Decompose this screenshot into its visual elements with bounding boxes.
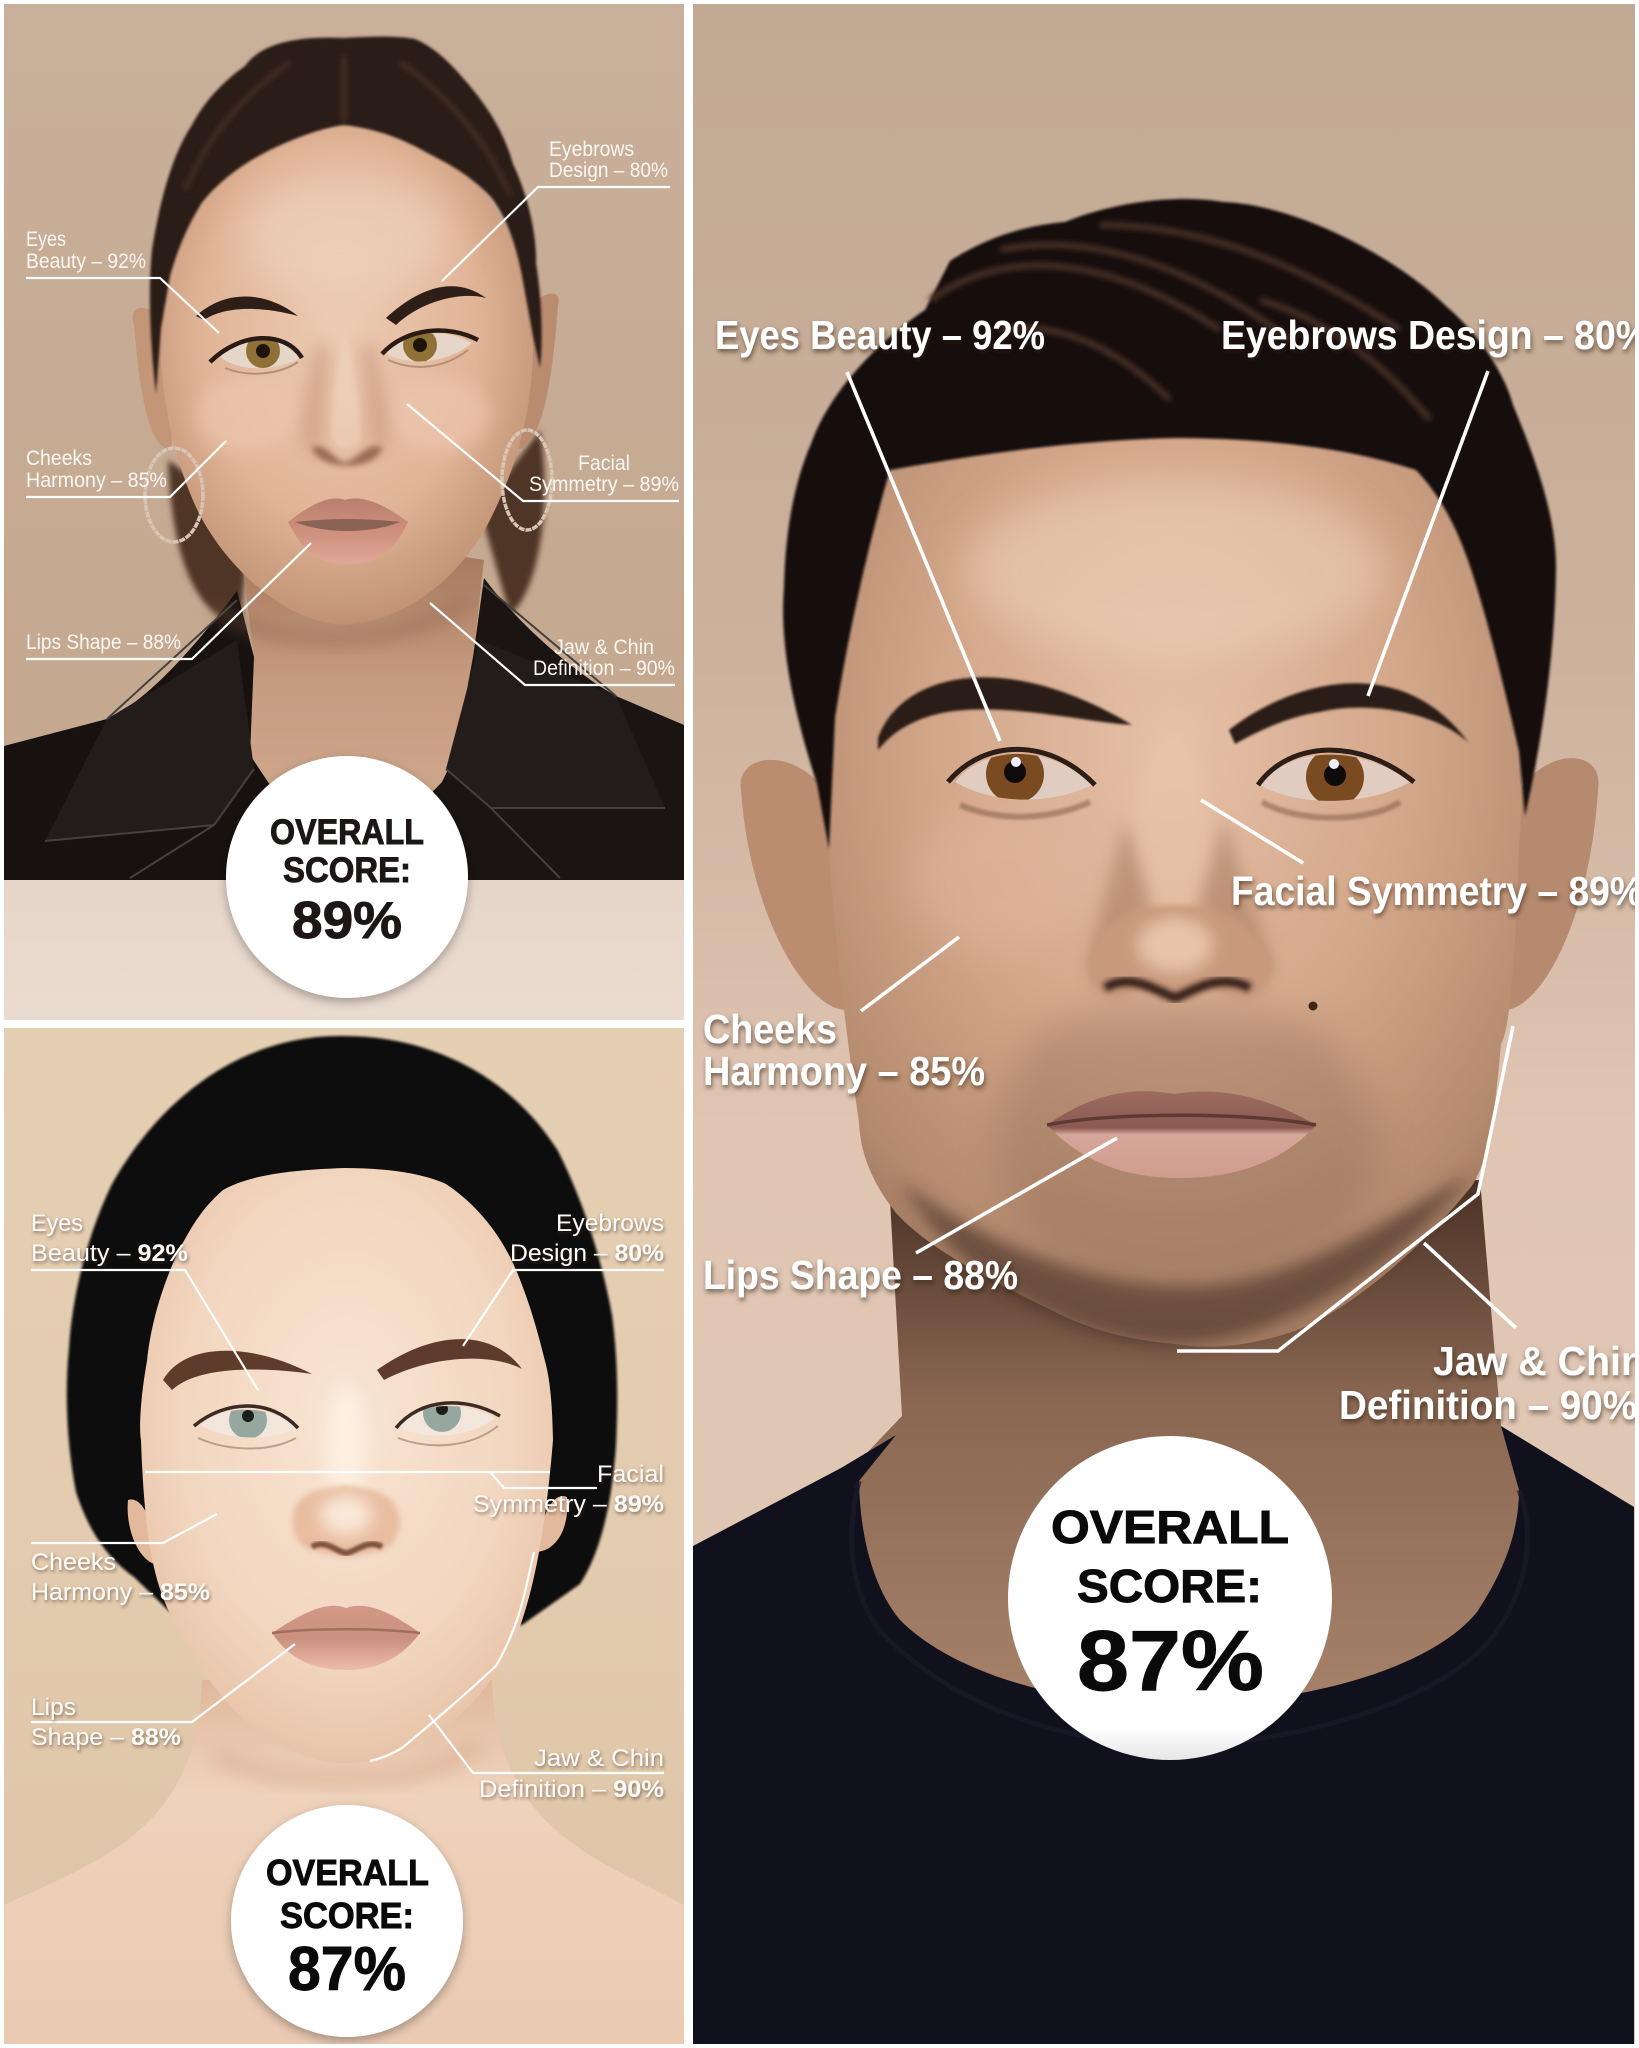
label: Eyebrows Design: Eyebrows — [556, 1210, 664, 1237]
label: Eyes Beauty: Beauty – 92% — [26, 250, 146, 273]
panel: man in dark t-shirt — [693, 4, 1639, 2044]
label: Cheeks Harmony: Cheeks — [703, 1006, 837, 1052]
label: Lips Shape: Lips Shape – 88% — [26, 631, 181, 654]
panel 1 backdrop — [4, 4, 684, 782]
portrait: man with swept hair — [693, 199, 1634, 2044]
score badge: 87%: OVERALL — [1051, 1501, 1289, 1553]
earrings — [145, 430, 552, 542]
score badge: 87% — [1008, 1436, 1332, 1760]
eyes and brows — [163, 1339, 522, 1448]
label: Lips Shape: Lips Shape – 88% — [703, 1252, 1018, 1298]
label: Facial Symmetry: Symmetry – 89% — [529, 473, 679, 496]
label: Facial Symmetry — [1201, 800, 1639, 914]
label: Facial Symmetry: Symmetry – 89% — [473, 1491, 664, 1518]
lips — [1047, 1091, 1316, 1178]
score badge: 87%: 87% — [288, 1935, 406, 2004]
label: Eyes Beauty: Eyes — [31, 1210, 83, 1237]
label: Jaw and Chin Definition: Jaw & Chin — [554, 636, 654, 659]
portrait: woman with slicked hair — [4, 37, 684, 880]
panel 1 lower band — [4, 880, 684, 1020]
panel: woman with black bob — [4, 1028, 684, 2044]
label: Lips Shape: Lips — [31, 1694, 76, 1721]
panel 2 backdrop — [4, 1028, 684, 1905]
label: Jaw and Chin Definition: Definition – 90% — [533, 657, 675, 680]
label: Eyes Beauty — [26, 228, 219, 333]
score badge: 89% — [226, 756, 468, 998]
label: Jaw and Chin Definition — [1177, 1026, 1639, 1428]
panel 3 backdrop — [693, 4, 1635, 2044]
score badge: 89%: SCORE: — [283, 851, 411, 890]
label: Lips Shape: Shape – 88% — [31, 1724, 181, 1751]
eyes and brows — [196, 286, 486, 374]
label: Cheeks Harmony: Cheeks — [26, 447, 92, 470]
label: Lips Shape — [31, 1644, 295, 1751]
lips — [288, 498, 408, 564]
score badge: 87%: OVERALL — [266, 1852, 429, 1893]
label: Eyebrows Design: Design – 80% — [549, 159, 668, 182]
score badge: 89%: 89% — [292, 892, 402, 950]
label: Jaw and Chin Definition: Definition – 90% — [479, 1776, 664, 1803]
label: Eyebrows Design — [442, 138, 670, 281]
label: Facial Symmetry: Facial — [597, 1461, 664, 1488]
label: Jaw and Chin Definition: Jaw & Chin — [534, 1745, 664, 1772]
panel: woman in leather jacket — [4, 4, 684, 1020]
label: Lips Shape — [26, 543, 311, 659]
label: Lips Shape — [703, 1138, 1117, 1298]
label: Eyes Beauty: Eyes Beauty – 92% — [715, 312, 1045, 358]
nose — [1089, 740, 1271, 1002]
label: Eyes Beauty — [31, 1210, 258, 1390]
label: Jaw and Chin Definition — [370, 1552, 664, 1803]
label: Cheeks Harmony — [703, 937, 985, 1094]
label: Eyes Beauty — [715, 312, 1045, 741]
label: Cheeks Harmony: Harmony – 85% — [703, 1048, 985, 1094]
score badge: 87%: SCORE: — [280, 1895, 414, 1936]
label: Eyebrows Design: Eyebrows — [549, 138, 634, 161]
lips — [272, 1606, 420, 1670]
label: Cheeks Harmony — [31, 1514, 217, 1606]
score badge: 87%: 87% — [1077, 1614, 1264, 1709]
portrait: woman with dark bob — [4, 1036, 684, 2044]
label: Eyebrows Design — [1221, 312, 1639, 696]
score badge: 87% — [231, 1805, 463, 2037]
score badge: 89%: OVERALL — [270, 813, 424, 852]
label: Cheeks Harmony: Harmony – 85% — [31, 1579, 210, 1606]
label: Cheeks Harmony: Harmony – 85% — [26, 469, 167, 492]
label: Facial Symmetry — [407, 404, 679, 501]
score badge: 87%: SCORE: — [1077, 1560, 1262, 1612]
label: Eyebrows Design — [463, 1210, 664, 1346]
label: Facial Symmetry: Facial — [578, 452, 630, 475]
label: Jaw and Chin Definition — [430, 603, 675, 685]
mole — [1308, 1002, 1318, 1010]
nose — [292, 1385, 400, 1558]
label: Facial Symmetry — [145, 1461, 664, 1518]
label: Eyes Beauty: Eyes — [26, 228, 66, 251]
label: Eyebrows Design: Design – 80% — [510, 1240, 664, 1267]
label: Cheeks Harmony: Cheeks — [31, 1549, 116, 1576]
eyes and brows — [878, 677, 1468, 818]
label: Cheeks Harmony — [26, 441, 226, 497]
nose — [303, 330, 388, 466]
label: Eyes Beauty: Beauty – 92% — [31, 1240, 188, 1267]
